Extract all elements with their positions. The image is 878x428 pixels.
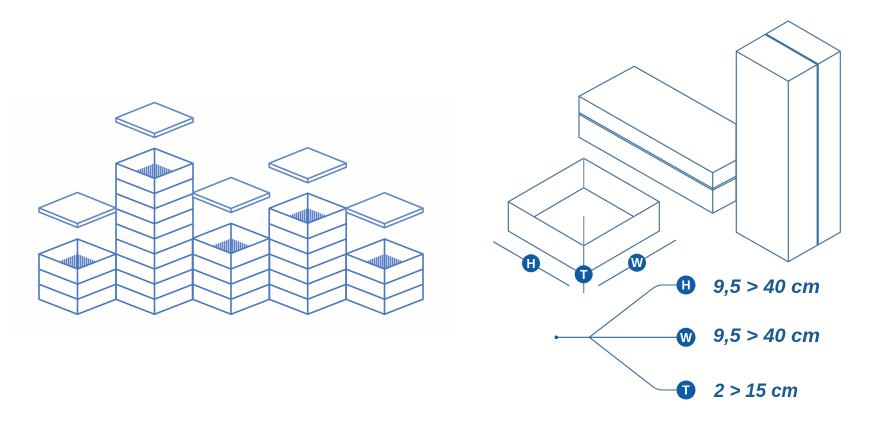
lid 3 — [192, 178, 270, 212]
tall upright box — [736, 21, 840, 262]
badge W: W — [631, 256, 643, 270]
lid 4 — [269, 148, 346, 183]
legend row W: 9,5 > 40 cm — [713, 326, 820, 347]
legend row T: T — [682, 384, 690, 398]
legend row H — [676, 276, 820, 298]
column 3 stack — [192, 223, 270, 314]
open tray with dimension markers — [493, 158, 676, 293]
dimension line W — [598, 240, 676, 286]
column 4 stack — [269, 193, 346, 314]
legend row W: W — [680, 331, 692, 345]
legend row H: H — [681, 278, 691, 292]
column 5 stack — [346, 239, 423, 314]
column 1 stack — [39, 239, 116, 314]
badge W — [628, 254, 646, 272]
column 2 stack — [116, 148, 193, 314]
lid 5 — [346, 193, 423, 228]
lid 2 — [116, 102, 193, 138]
dimension line H — [493, 242, 569, 286]
lid 1 — [39, 192, 116, 228]
badge H: H — [526, 257, 536, 271]
badge H — [522, 254, 540, 272]
long closed box — [579, 66, 736, 213]
connector lines — [554, 285, 678, 390]
legend row T — [676, 380, 798, 402]
badge T: T — [580, 268, 588, 282]
legend row H: 9,5 > 40 cm — [713, 277, 820, 298]
legend row T: 2 > 15 cm — [713, 381, 798, 402]
tape strip — [766, 34, 818, 245]
badge T — [575, 265, 593, 283]
dimension legend tree — [554, 276, 820, 402]
stacked boxes illustration — [39, 102, 423, 314]
